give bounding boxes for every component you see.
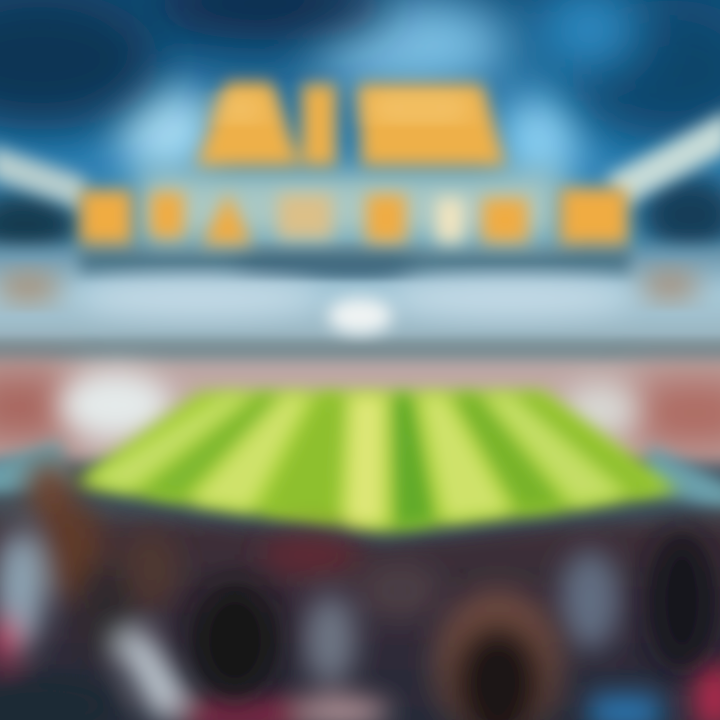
football pitch: [70, 392, 680, 532]
stands: [0, 245, 720, 380]
sky background: [0, 0, 720, 270]
crowd foreground: [0, 460, 720, 720]
title upper row: [196, 82, 506, 166]
pitch stripes: [85, 395, 660, 528]
title lower row: [80, 188, 628, 244]
white logo patch: [328, 298, 392, 334]
spectators: [0, 460, 720, 720]
lower stands, red and pink seating: [0, 362, 720, 520]
stadium light beams: [0, 110, 720, 210]
title block: [80, 82, 628, 244]
